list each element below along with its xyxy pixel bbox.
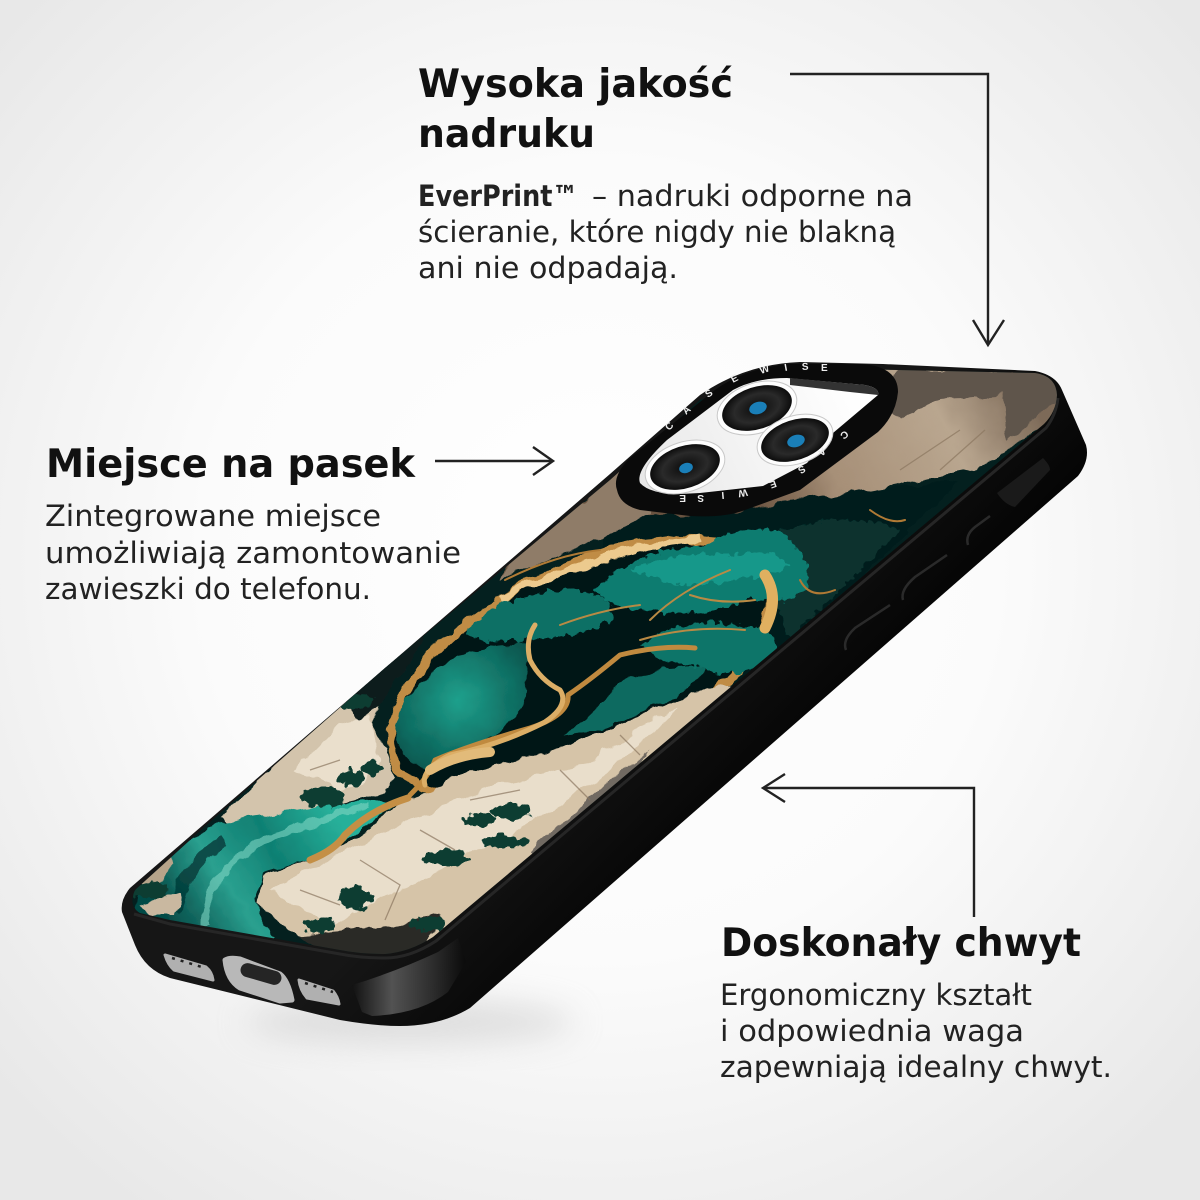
heading block: grip xyxy=(720,921,1112,1084)
shore rock bottom xyxy=(140,895,180,915)
artwork panel xyxy=(132,370,1057,954)
rock cliff shade right xyxy=(530,750,650,860)
upper-left dark edge xyxy=(346,636,424,720)
tree canopy xyxy=(132,520,900,933)
camera window xyxy=(639,378,878,494)
rock foot dark xyxy=(300,915,440,960)
left shoulder rock xyxy=(500,470,660,578)
side button: volume up xyxy=(902,555,947,600)
text: EverPrint description: – nadruki odporne na xyxy=(592,179,913,213)
lower rock highlights xyxy=(270,705,680,925)
text: grip description xyxy=(720,978,1112,1084)
rock cracks xyxy=(300,430,985,920)
corner gloss highlight xyxy=(352,938,466,1016)
shore rock left xyxy=(142,858,174,884)
left rock highlight xyxy=(295,715,380,790)
heading block: print quality xyxy=(418,62,913,285)
lower cream rocks xyxy=(258,685,735,960)
rim highlight along case edge xyxy=(134,398,1058,958)
bezel brand text bottom: CASEWISE xyxy=(679,428,850,503)
small dark trees xyxy=(132,694,532,933)
ring bright section xyxy=(500,538,700,600)
camera bezel xyxy=(616,364,898,516)
tree canopy upper xyxy=(595,529,808,613)
text: strap slot description xyxy=(45,499,461,606)
river dark streak xyxy=(175,840,225,912)
text: grip description: i odpowiednia waga xyxy=(720,1014,1024,1048)
top rock grey strip xyxy=(885,368,1060,440)
window top shade xyxy=(790,378,878,395)
text: EverPrint description xyxy=(418,179,913,285)
drop shadow under phone xyxy=(245,1000,575,1044)
heading: Miejsce na pasek: Miejsce na pasek xyxy=(46,442,416,487)
dark forest background xyxy=(600,480,960,720)
heading: Wysoka jakość nadruku: nadruku xyxy=(418,112,595,157)
text: EverPrint description: ani nie odpadają. xyxy=(418,251,678,285)
inner circle xyxy=(394,544,766,788)
case body xyxy=(122,362,1087,1026)
lens left xyxy=(638,431,732,503)
heading: Doskonały chwyt: Doskonały chwyt xyxy=(721,921,1081,966)
phone in case xyxy=(100,340,1100,1026)
forest canopy texture xyxy=(772,520,900,640)
bezel brand text top: CASEWISE xyxy=(663,362,828,433)
lens top xyxy=(710,372,804,444)
inner teal right xyxy=(560,665,710,735)
left upper rock xyxy=(220,690,396,825)
heading block: strap slot xyxy=(45,442,461,606)
camera bump xyxy=(616,362,898,516)
river light streak xyxy=(205,808,370,925)
text: strap slot description: zawieszki do telefonu. xyxy=(45,572,371,606)
side button: switch xyxy=(967,516,990,545)
text: grip description: Ergonomiczny kształt xyxy=(720,978,1032,1012)
gold ring xyxy=(385,534,767,794)
lens right xyxy=(750,405,840,475)
charging port xyxy=(225,958,292,1001)
arrow: grip to case side xyxy=(763,774,974,917)
text: strap slot description: umożliwiają zamontowanie xyxy=(45,536,461,570)
river xyxy=(135,798,410,940)
bottom speaker left xyxy=(165,955,213,980)
text: strap slot description: Zintegrowane miejsce xyxy=(45,499,381,533)
inner teal left xyxy=(392,645,530,770)
side button: volume down xyxy=(845,605,890,650)
bottom speaker right xyxy=(299,980,339,1004)
side button: action xyxy=(997,458,1050,507)
top rock xyxy=(500,366,1060,578)
text: EverPrint description: EverPrint™ xyxy=(418,179,578,213)
arrow: print quality to case back xyxy=(790,74,1004,345)
heading: Wysoka jakość nadruku xyxy=(418,62,733,157)
tree canopy left xyxy=(465,590,612,641)
arrow: strap slot to camera corner xyxy=(435,447,553,475)
heading: Wysoka jakość nadruku: Wysoka jakość xyxy=(418,62,733,107)
text: EverPrint description: ścieranie, które nigdy nie blakną xyxy=(418,215,896,249)
gold trunk and branches xyxy=(310,510,905,860)
text: grip description: zapewniają idealny chwyt. xyxy=(720,1050,1112,1084)
tree canopy right lower xyxy=(640,622,777,674)
canopy highlights xyxy=(630,552,790,585)
